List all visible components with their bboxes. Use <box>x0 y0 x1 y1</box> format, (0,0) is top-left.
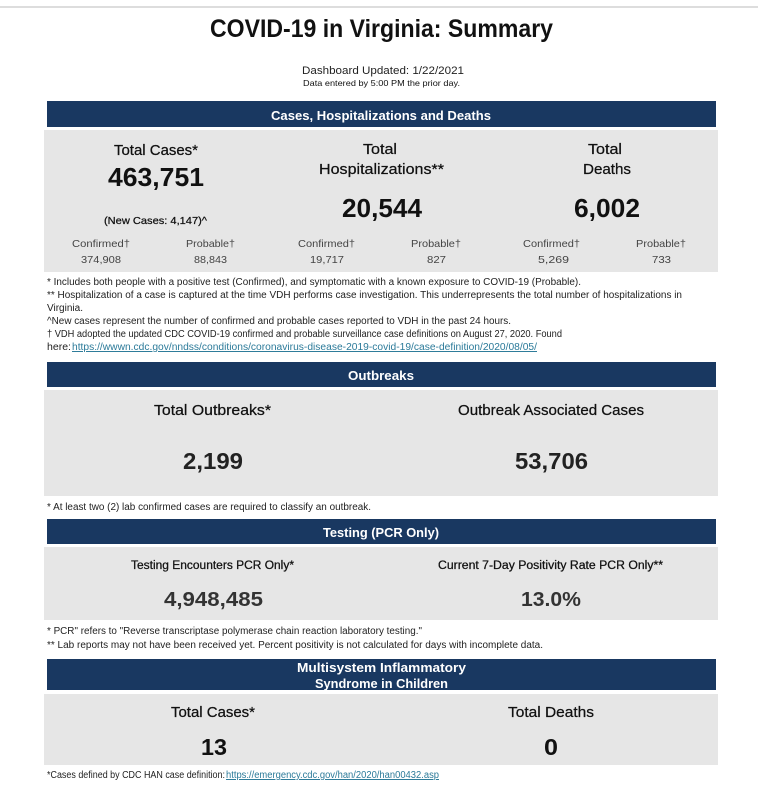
total hospitalizations: Confirmed† <box>298 238 355 250</box>
outbreak associated cases <box>458 402 644 474</box>
panel: cases, hospitalizations and deaths <box>44 130 718 272</box>
total cases: Confirmed† <box>72 238 130 250</box>
testing encounters <box>131 560 295 611</box>
MIS-C total deaths: 0 <box>544 734 558 760</box>
section header: outbreaks <box>47 362 716 387</box>
total deaths: Confirmed† <box>523 238 580 250</box>
total cases: 463,751 <box>108 164 204 192</box>
footnote: outbreaks: * At least two (2) lab confirmed cases are required to classify an outbreak. <box>47 502 371 513</box>
total hospitalizations: 20,544 <box>342 195 423 223</box>
dashboard update note: Dashboard Updated: 1/22/2021 <box>302 65 464 77</box>
footnotes: cases: ^New cases represent the number of confirmed and probable cases reported to VDH in the past 24 hours. <box>47 316 511 327</box>
dashboard update note <box>302 65 464 88</box>
title: COVID-19 in Virginia: Summary <box>210 15 553 43</box>
total cases <box>72 142 235 266</box>
footnotes: cases: * Includes both people with a positive test (Confirmed), and symptomatic with a known exposure to COVID-19 (Probable). <box>47 277 581 288</box>
total cases: Probable† <box>186 238 235 250</box>
total outbreaks <box>154 402 271 474</box>
MIS-C total cases <box>171 704 255 760</box>
MIS-C total cases: 13 <box>201 734 227 760</box>
positivity rate <box>438 560 664 611</box>
section header: outbreaks: Outbreaks <box>348 368 414 383</box>
section header: cases: Cases, Hospitalizations and Deaths <box>271 108 491 123</box>
total outbreaks: 2,199 <box>183 448 243 474</box>
total hospitalizations: Probable† <box>411 238 461 250</box>
footnotes: cases: https://wwwn.cdc.gov/nndss/conditions/coronavirus-disease-2019-covid-19/case-definition/2020/08/05/ <box>72 342 537 353</box>
section header: testing: Testing (PCR Only) <box>323 525 439 540</box>
total deaths <box>523 141 686 266</box>
footnotes: cases: here: <box>47 342 71 353</box>
MIS-C total deaths: Total Deaths <box>508 704 594 721</box>
footnotes: testing <box>47 626 543 651</box>
section header: MIS-C <box>47 659 716 691</box>
positivity rate: Current 7-Day Positivity Rate PCR Only** <box>438 560 664 572</box>
footnotes: cases: † VDH adopted the updated CDC COVID-19 confirmed and probable surveillance case definitions on August 27, 2020. Found <box>47 329 562 340</box>
total cases: 88,843 <box>194 254 227 266</box>
total cases: 374,908 <box>81 254 121 266</box>
section header: cases <box>47 101 716 127</box>
total deaths: Total <box>588 141 622 158</box>
positivity rate: 13.0% <box>521 589 581 611</box>
section header: testing <box>47 519 716 544</box>
section header: MIS-C: Syndrome in Children <box>315 676 448 691</box>
footnote: MIS-C: *Cases defined by CDC HAN case definition: <box>47 770 225 781</box>
testing encounters: 4,948,485 <box>164 589 263 611</box>
footnotes: testing: ** Lab reports may not have been received yet. Percent positivity is not calculated for days with incomplete data. <box>47 640 543 651</box>
panel: MIS-C <box>44 694 718 765</box>
total deaths: 5,269 <box>538 254 569 266</box>
total deaths: 733 <box>652 254 671 266</box>
footnote: MIS-C: https://emergency.cdc.gov/han/2020/han00432.asp <box>226 770 440 781</box>
footnotes: cases: ** Hospitalization of a case is captured at the time VDH performs case investigation. This underrepresents the total number of hospitalizations in <box>47 290 682 301</box>
footnotes: cases <box>47 277 682 353</box>
footnotes: cases: Virginia. <box>47 303 83 314</box>
total cases: (New Cases: 4,147)^ <box>104 215 207 227</box>
outbreak associated cases: 53,706 <box>515 448 588 474</box>
footnote: MIS-C <box>47 770 440 781</box>
MIS-C total deaths <box>508 704 594 760</box>
MIS-C total cases: Total Cases* <box>171 704 255 721</box>
dashboard update note: Data entered by 5:00 PM the prior day. <box>303 78 460 88</box>
total cases: Total Cases* <box>114 142 198 159</box>
total hospitalizations: Total <box>363 141 397 158</box>
total hospitalizations: Hospitalizations** <box>319 161 444 178</box>
section header: MIS-C: Multisystem Inflammatory <box>297 660 467 675</box>
outbreak associated cases: Outbreak Associated Cases <box>458 402 644 419</box>
total hospitalizations: 827 <box>427 254 446 266</box>
total hospitalizations <box>298 141 461 266</box>
total hospitalizations: 19,717 <box>310 254 344 266</box>
panel: outbreaks <box>44 390 718 496</box>
testing encounters: Testing Encounters PCR Only* <box>131 560 295 572</box>
total outbreaks: Total Outbreaks* <box>154 402 271 419</box>
panel: testing <box>44 547 718 620</box>
footnotes: testing: * PCR" refers to "Reverse transcriptase polymerase chain reaction laboratory testing." <box>47 626 423 637</box>
total deaths: 6,002 <box>574 195 640 223</box>
total deaths: Deaths <box>583 161 631 178</box>
total deaths: Probable† <box>636 238 686 250</box>
